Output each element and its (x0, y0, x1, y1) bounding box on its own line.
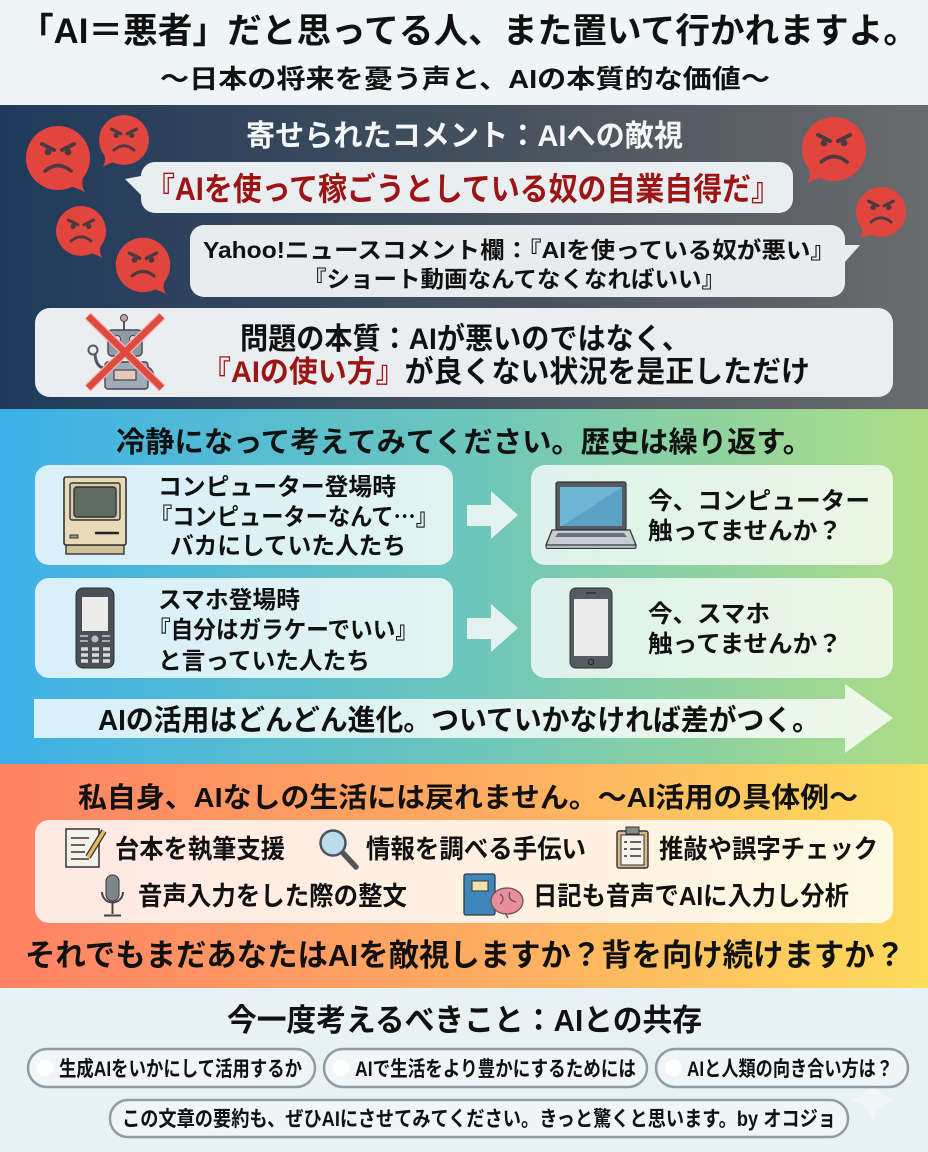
text: computer era: コンピューター登場時 (158, 474, 396, 501)
Yahoo line 2: 『ショート動画なんてなくなればいい』 (303, 266, 725, 292)
card: computer now (531, 465, 893, 565)
speech bubble: Yahoo comments (190, 225, 860, 297)
text: phone now (648, 601, 842, 658)
icon: angry bubble 6 (856, 187, 906, 239)
text: computer era (150, 474, 438, 560)
heading: history: 冷静になって考えてみてください。歴史は繰り返す。 (116, 426, 812, 459)
pill: summary note (110, 1100, 848, 1137)
label: script writing: 台本を執筆支援 (115, 834, 285, 864)
card: computer era (35, 465, 453, 565)
icon: microphone (102, 875, 123, 916)
speech bubble: main quote (125, 162, 793, 213)
pill: enrich life (324, 1049, 647, 1087)
pill: summary note: この文章の要約も、ぜひAIにさせてみてください。きっと驚くと思います。by オコジョ (122, 1108, 836, 1131)
text: phone era: と言っていた人たち (158, 648, 370, 675)
icon: crossed-out robot (88, 314, 162, 389)
main title: 「AI＝悪者」だと思ってる人、また置いて行かれますよ。 (19, 12, 918, 51)
label: research: 情報を調べる手伝い (366, 834, 586, 864)
icon: sparkle (850, 1077, 896, 1122)
icon: angry bubble 1 (26, 126, 90, 192)
pill: how to use AI: 生成AIをいかにして活用するか (59, 1057, 302, 1081)
header panel (0, 0, 928, 105)
text: computer era: バカにしていた人たち (170, 533, 406, 560)
icon: clipboard (617, 827, 648, 868)
pill: how to use AI (28, 1049, 315, 1087)
text: computer era: 『コンピューターなんて…』 (150, 497, 438, 532)
card: phone now (531, 578, 893, 678)
pill: humans and AI (656, 1049, 908, 1087)
callout: essence of the problem (35, 308, 893, 397)
text: computer now: 今、コンピューター (648, 488, 870, 515)
arrow: phone (467, 604, 518, 652)
icon: angry bubble 4 (116, 238, 170, 294)
icon: laptop (546, 482, 636, 548)
icon: angry bubble 3 (56, 206, 106, 258)
icon: feature phone (76, 588, 114, 668)
heading: coexistence: 今一度考えるべきこと：AIとの共存 (227, 1003, 702, 1038)
Yahoo line 1: Yahoo!ニュースコメント欄：『AIを使っている奴が悪い』 (203, 237, 835, 263)
text: phone now: 触ってませんか？ (648, 631, 842, 658)
panel: AI use examples (0, 764, 928, 989)
pill: enrich life: AIで生活をより豊かにするためには (355, 1058, 636, 1081)
callout line 1: 問題の本質：AIが悪いのではなく、 (240, 322, 690, 356)
arrow banner: AI evolves (34, 684, 893, 753)
icon: retro computer (64, 477, 126, 554)
icon: smartphone (570, 588, 612, 668)
text: computer now (648, 488, 870, 545)
panel: coexistence (0, 988, 928, 1152)
panel: history repeats (0, 409, 928, 765)
text: phone era: スマホ登場時 (158, 587, 300, 614)
callout line 2: 『AIの使い方』が良くない状況を是正しただけ (202, 355, 810, 389)
arrow: computer (467, 491, 518, 539)
icon: document and pencil (66, 829, 104, 867)
heading: examples: 私自身、AIなしの生活には戻れません。〜AI活用の具体例〜 (78, 782, 858, 813)
banner text: AIの活用はどんどん進化。ついていかなければ差がつく。 (98, 703, 820, 737)
subtitle: 〜日本の将来を憂う声と、AIの本質的な価値〜 (160, 64, 770, 94)
text: computer now: 触ってませんか？ (648, 518, 842, 545)
label: proofreading: 推敲や誤字チェック (659, 834, 878, 864)
quote text: 『AIを使って稼ごうとしている奴の自業自得だ』 (146, 171, 780, 207)
icon: angry bubble 5 (802, 117, 866, 183)
icon: notebook and brain (464, 874, 523, 918)
box: examples list (35, 820, 893, 923)
text: phone era: 『自分はガラケーでいい』 (148, 617, 418, 644)
statement: still hostile?: それでもまだあなたはAIを敵視しますか？背を向け続けますか？ (25, 938, 905, 973)
heading: comments: 寄せられたコメント：AIへの敵視 (246, 120, 683, 153)
text: phone era (148, 587, 418, 675)
card: phone era (35, 578, 453, 678)
icon: magnifier (320, 830, 356, 867)
label: diary analysis: 日記も音声でAIに入力し分析 (533, 881, 849, 911)
icon: angry bubble 2 (99, 115, 149, 167)
panel: hostile comments (0, 105, 928, 409)
label: voice input: 音声入力をした際の整文 (138, 881, 407, 911)
text: phone now: 今、スマホ (648, 601, 770, 628)
